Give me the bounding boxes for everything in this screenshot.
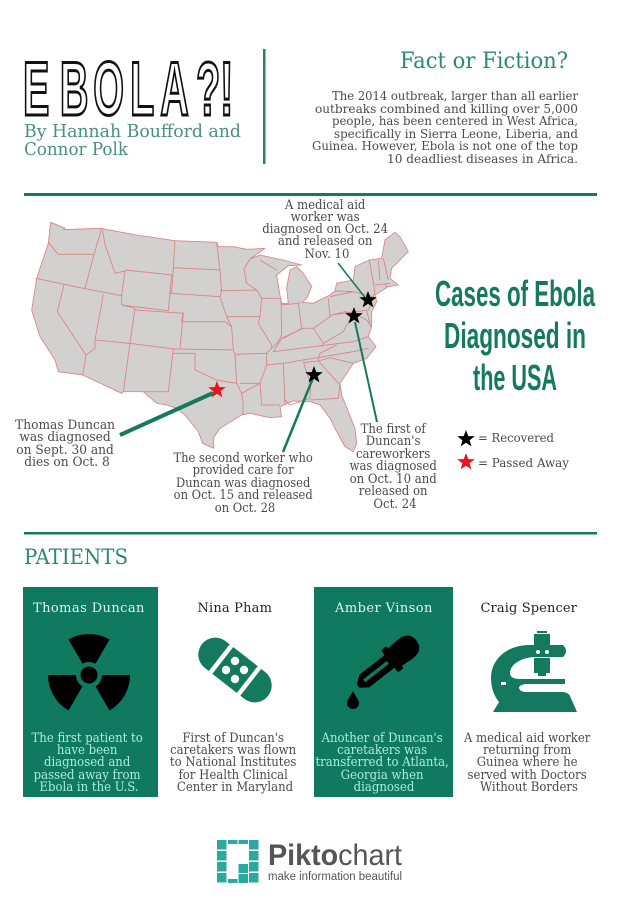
intro text block: specifically in Sierra Leone, Liberia, and [334, 126, 578, 141]
icon: bandage [191, 630, 279, 710]
byline: By Hannah Boufford and [24, 121, 241, 142]
panel: Amber Vinson [314, 587, 453, 797]
legend [457, 430, 570, 470]
map of USA [32, 222, 408, 452]
logo: Piktochart: Piktochart [268, 839, 403, 872]
callout: second worker: The second worker who [173, 450, 313, 465]
callout: first careworker: Duncan's [366, 433, 420, 448]
heading: cases of ebola: the USA [473, 357, 557, 398]
heading: fact or fiction: Fact or Fiction? [400, 49, 568, 74]
panel: Craig Spencer: A medical aid worker [463, 730, 590, 745]
callout: first careworker: was diagnosed [349, 458, 437, 473]
panel: Amber Vinson: Another of Duncan's [321, 730, 443, 745]
intro text block: 10 deadliest diseases in Africa. [387, 151, 578, 166]
panel: Craig Spencer: Without Borders [480, 779, 578, 794]
panel: Craig Spencer: served with Doctors [468, 767, 587, 782]
legend: = Recovered [478, 430, 554, 445]
callout: first careworker: Oct. 24 [373, 496, 417, 511]
heading: patients: PATIENTS [24, 545, 128, 569]
callout: medical aid worker: diagnosed on Oct. 24 [262, 221, 388, 236]
panel: Nina Pham: Center in Maryland [177, 779, 293, 794]
panel: Nina Pham: caretakers was flown [170, 742, 296, 757]
intro text block: The 2014 outbreak, larger than all earlier [332, 88, 578, 103]
panel: Nina Pham: to National Institutes [170, 754, 296, 769]
icon: radiation [48, 634, 130, 710]
panel: Craig Spencer: returning from [483, 742, 572, 757]
panel: Thomas Duncan: The first patient to [31, 730, 143, 745]
byline: Connor Polk [24, 139, 129, 160]
panel: Nina Pham: First of Duncan's [182, 730, 284, 745]
byline [24, 121, 241, 160]
callout: second worker: provided care for [193, 462, 294, 477]
callout: second worker: Duncan was diagnosed [176, 475, 310, 490]
intro text block: people, has been centered in West Africa, [332, 113, 578, 128]
panel: Amber Vinson: transferred to Atlanta, [315, 754, 449, 769]
panel: Amber Vinson: diagnosed [354, 779, 414, 794]
panel: Thomas Duncan: Ebola in the U.S. [39, 779, 139, 794]
panel: Nina Pham: for Health Clinical [178, 767, 288, 782]
panel: Thomas Duncan: diagnosed and [44, 754, 130, 769]
panel: Craig Spencer: Craig Spencer [480, 601, 578, 616]
panel: Amber Vinson: Amber Vinson [334, 601, 433, 616]
callout: Thomas Duncan: was diagnosed [19, 429, 111, 444]
callout: first careworker: on Oct. 10 and [350, 471, 437, 486]
callout: medical aid worker: A medical aid [284, 197, 365, 212]
panel: Nina Pham: Nina Pham [198, 601, 272, 616]
map leader lines [120, 263, 377, 452]
callout: medical aid worker: worker was [291, 209, 360, 224]
section divider [24, 193, 597, 196]
legend: = Passed Away [478, 455, 570, 470]
panel: Thomas Duncan [23, 587, 158, 797]
intro text block: Guinea. However, Ebola is not one of the top [312, 138, 578, 153]
callout: second worker: on Oct. 28 [215, 500, 275, 515]
icon: dropper [347, 629, 425, 709]
callout: medical aid worker: and released on [278, 233, 372, 248]
callout: Thomas Duncan: Thomas Duncan [15, 417, 115, 432]
case markers [208, 291, 377, 397]
callout: second worker: on Oct. 15 and released [174, 487, 313, 502]
panel: Craig Spencer: Guinea where he [477, 754, 578, 769]
logo: Piktochart [217, 839, 403, 883]
intro text block: outbreaks combined and killing over 5,000 [315, 101, 578, 116]
callout: first careworker: The first of [361, 421, 427, 436]
logo: Piktochart: make information beautiful [268, 871, 402, 883]
header divider [263, 49, 266, 164]
panel: Thomas Duncan: passed away from [34, 767, 141, 782]
panel: Thomas Duncan: Thomas Duncan [33, 601, 145, 616]
intro text block [312, 88, 578, 166]
callout: Thomas Duncan: on Sept. 30 and [16, 442, 114, 457]
callout: medical aid worker: Nov. 10 [305, 246, 350, 261]
panel: Amber Vinson: caretakers was [337, 742, 427, 757]
heading: cases of ebola [435, 273, 596, 398]
panel: Amber Vinson: Georgia when [341, 767, 424, 782]
panel: Nina Pham [170, 601, 300, 794]
icon: microscope [491, 631, 577, 712]
panel: Craig Spencer [463, 601, 594, 794]
callout: first careworker: careworkers [356, 446, 430, 461]
section divider [24, 532, 597, 534]
title: EBOLA?! [23, 46, 233, 131]
panel: Thomas Duncan: have been [57, 742, 117, 757]
callout: Thomas Duncan: dies on Oct. 8 [24, 454, 110, 469]
callout: first careworker: released on [359, 483, 428, 498]
